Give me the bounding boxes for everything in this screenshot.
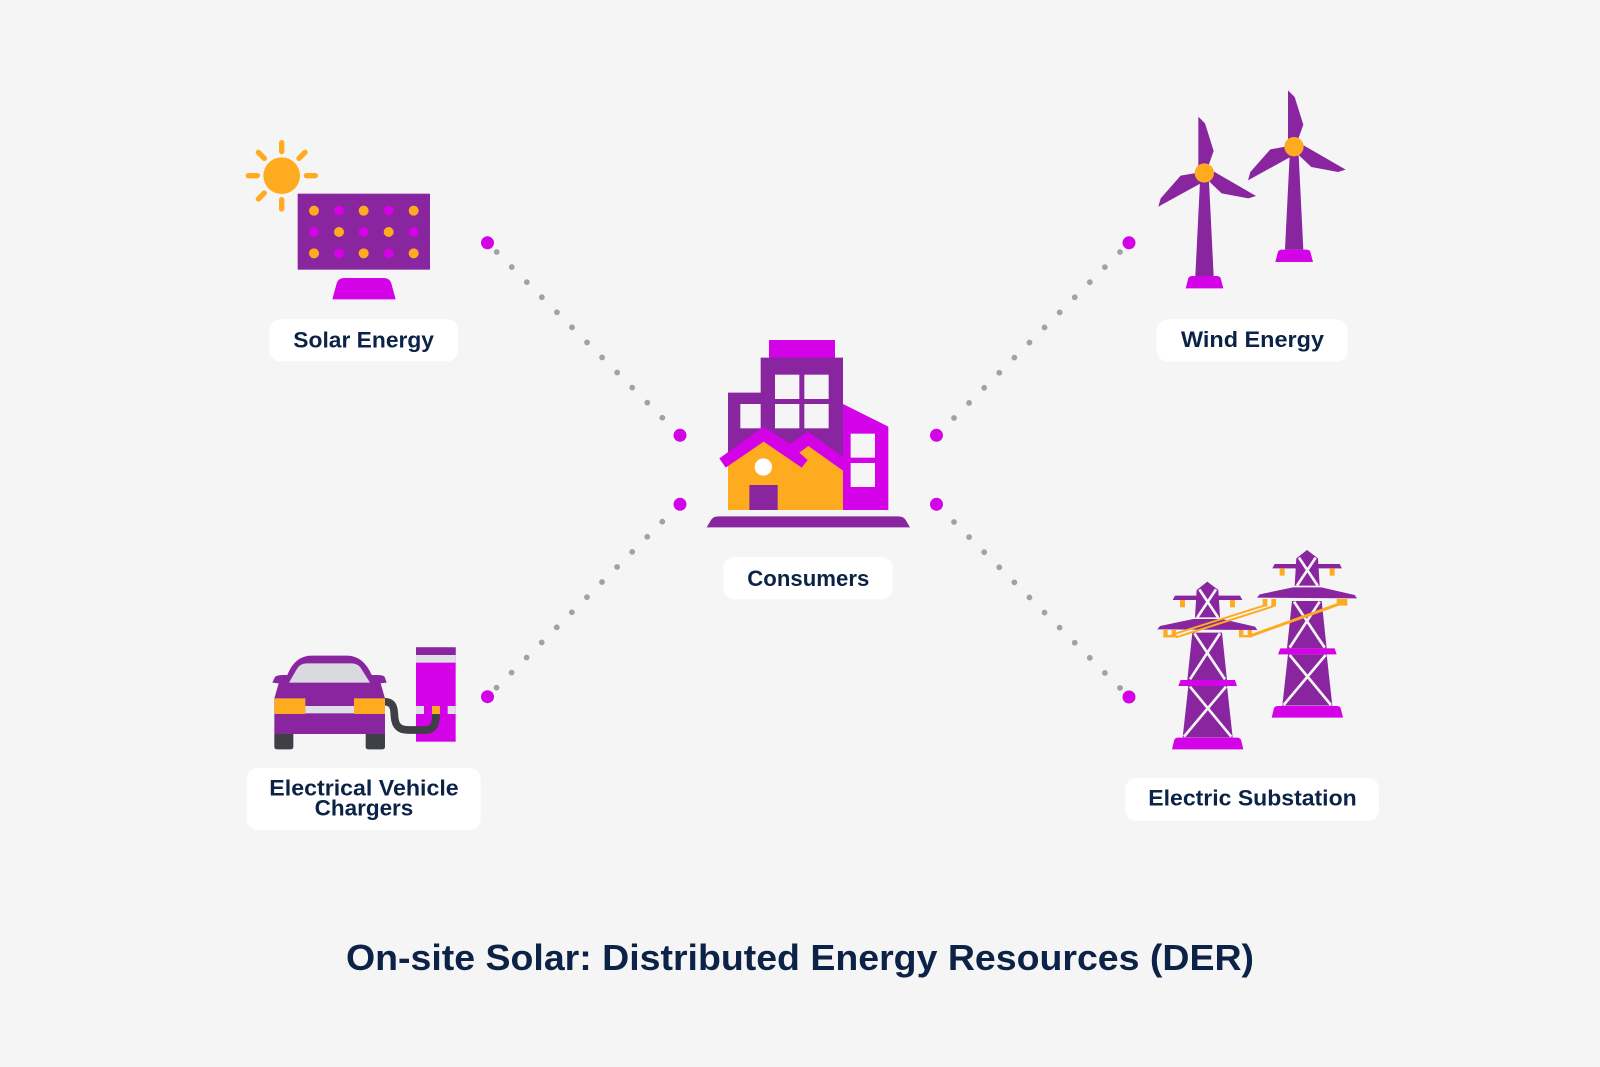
connector: solar to consumers — [481, 236, 686, 442]
icon: electric car and charger — [272, 647, 456, 749]
label: wind energy: Wind Energy — [1181, 327, 1325, 352]
connector: wind to consumers — [930, 236, 1136, 442]
label: wind energy — [1157, 319, 1348, 362]
label: solar energy: Solar Energy — [293, 327, 435, 352]
label: electric substation — [1125, 778, 1379, 821]
connector: EV chargers to consumers — [481, 498, 686, 703]
connector: substation to consumers — [930, 498, 1136, 704]
icon: solar panel with sun — [248, 143, 430, 299]
title: On-site Solar: Distributed Energy Resources (DER) — [346, 937, 1254, 978]
label: electrical vehicle chargers — [247, 768, 481, 830]
label: solar energy — [269, 319, 458, 361]
icon: consumer buildings and house — [707, 340, 910, 527]
label: consumers — [723, 557, 893, 599]
icon: electricity pylons — [1157, 550, 1357, 749]
label: consumers: Consumers — [747, 566, 869, 591]
label: electrical vehicle chargers: Electrical Vehicle — [269, 776, 459, 801]
label: electric substation: Electric Substation — [1148, 786, 1357, 811]
label: electrical vehicle chargers: Chargers — [315, 796, 413, 821]
icon: wind turbines — [1158, 90, 1346, 288]
